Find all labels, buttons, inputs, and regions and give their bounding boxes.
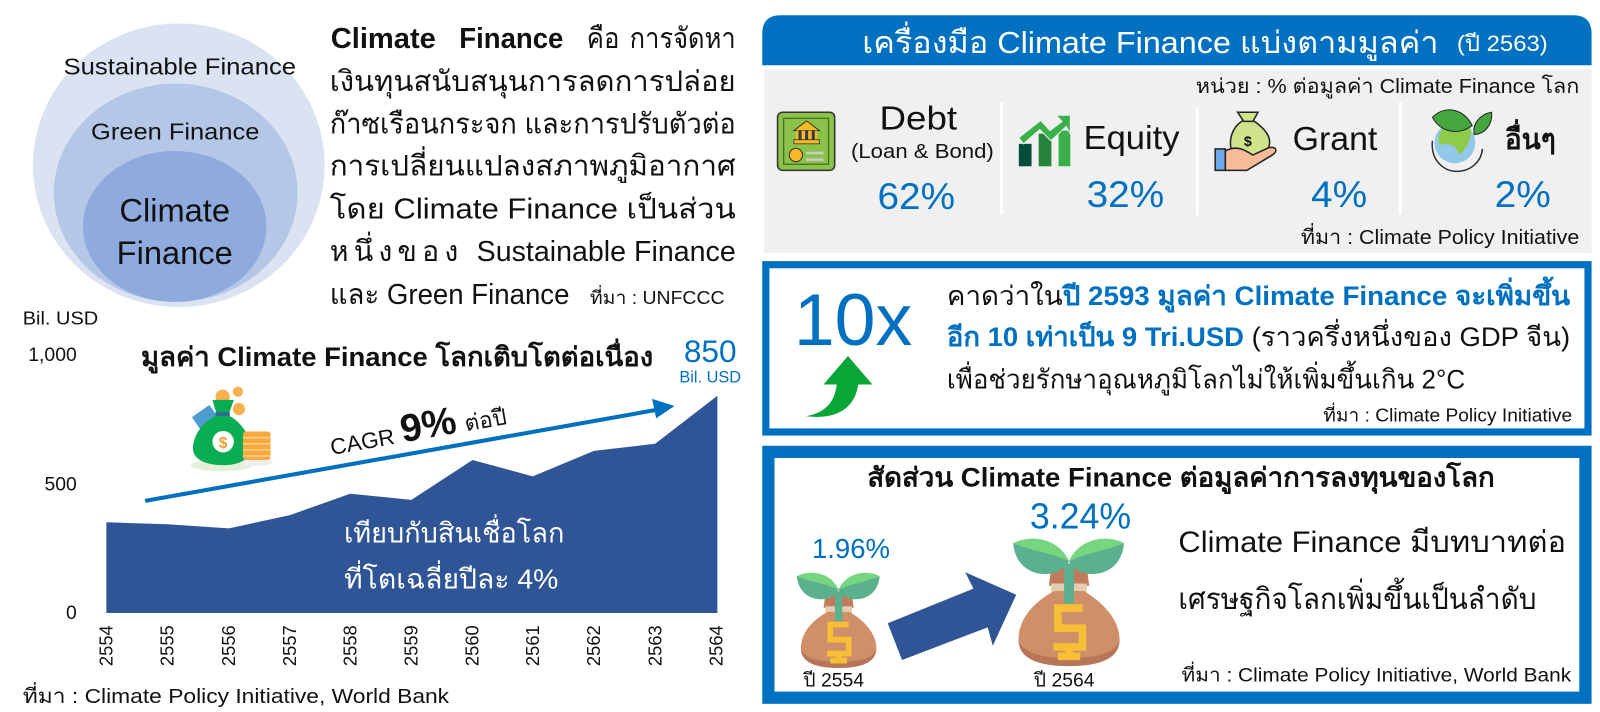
text block: role of Climate Finance — [1178, 526, 1566, 617]
text block: definition of Climate Finance: หนึ่งของ — [330, 232, 458, 268]
value: 32%: 32% — [1087, 174, 1164, 215]
value: 2%: 2% — [1495, 174, 1551, 215]
icon: grant hand with money: $ — [1244, 134, 1252, 150]
text inside area — [344, 515, 564, 595]
text line 2: อีก 10 เท่าเป็น 9 Tri.USD (ราวครึ่งหนึ่งของ GDP จีน) — [947, 319, 1570, 352]
text block: definition of Climate Finance: การจัดหา — [630, 23, 736, 55]
text block: definition of Climate Finance: Finance — [459, 23, 563, 55]
y axis labels: 1,000 — [28, 344, 77, 366]
chart: global Climate Finance growth — [23, 307, 741, 708]
unit note: หน่วย : % ต่อมูลค่า Climate Finance โลก — [1196, 74, 1579, 99]
icon: large money bag with sprout — [1013, 539, 1124, 666]
label: Equity: Equity — [1084, 120, 1180, 157]
text block: definition of Climate Finance: การเปลี่ยนแปลงสภาพภูมิอากาศ — [330, 146, 736, 183]
icon: equity chart — [1019, 115, 1070, 166]
panel: instruments by value — [762, 15, 1592, 253]
source: ที่มา : Climate Policy Initiative, World Bank — [1182, 661, 1571, 686]
x axis labels: 2554 — [95, 625, 116, 666]
label: year 2554: ปี 2554 — [803, 669, 864, 691]
box border — [768, 452, 1585, 698]
text block: definition of Climate Finance: ก๊าซเรือนกระจก และการปรับตัวต่อ — [330, 109, 736, 141]
icon: globe with leaves — [1432, 110, 1492, 171]
x axis labels: 2563 — [644, 625, 665, 666]
source: ที่มา : Climate Policy Initiative — [1323, 402, 1572, 425]
x axis labels: 2561 — [522, 625, 543, 666]
text block: role of Climate Finance: Climate Finance มีบทบาทต่อ — [1178, 526, 1566, 559]
value: 4%: 4% — [1311, 174, 1367, 215]
panel: 10x projection — [766, 265, 1588, 432]
callout: 850 Bil. USD — [679, 333, 741, 387]
y axis labels: 500 — [44, 474, 77, 496]
icon: grant hand with money — [1215, 112, 1276, 170]
label: CAGR 9% per year: CAGR 9%ต่อปี — [326, 390, 509, 464]
dividers — [1000, 102, 1402, 215]
label: Debt: Debt — [880, 101, 958, 138]
text line 3: เพื่อช่วยรักษาอุณหภูมิโลกไม่ให้เพิ่มขึ้นเกิน 2°C — [947, 361, 1465, 396]
header bar — [762, 15, 1592, 65]
x axis labels: 2555 — [157, 625, 178, 666]
icon: green up arrow — [806, 356, 872, 417]
arrow: growth trend — [145, 399, 675, 501]
x axis labels: 2564 — [705, 625, 726, 666]
text block: definition of Climate Finance: คือ — [587, 23, 619, 55]
y axis labels — [28, 344, 77, 624]
x axis labels: 2557 — [279, 625, 300, 666]
label: Green Finance: Green Finance — [91, 119, 259, 145]
text block: definition of Climate Finance: และ Green Finance — [330, 279, 569, 311]
label: Climate Finance: Finance — [117, 234, 233, 271]
icon: money bag with coins — [191, 387, 273, 471]
chart title: มูลค่า Climate Finance โลกเติบโตต่อเนื่อง — [141, 338, 653, 374]
area series — [106, 396, 717, 613]
box border — [766, 265, 1588, 432]
heading: สัดส่วน Climate Finance ต่อมูลค่าการลงทุนของโลก — [867, 462, 1495, 495]
callout: 850 Bil. USD: Bil. USD — [679, 369, 741, 387]
panel: share of world investment — [768, 452, 1585, 698]
nested circles diagram — [33, 23, 325, 307]
icon: debt certificate — [778, 112, 835, 170]
circle: Green Finance — [54, 84, 298, 302]
x axis labels: 2559 — [400, 625, 421, 666]
label: Loan and Bond: (Loan & Bond) — [851, 141, 994, 163]
value: 10x: 10x — [794, 279, 912, 361]
text block: role of Climate Finance: เศรษฐกิจโลกเพิ่มขึ้นเป็นลำดับ — [1178, 578, 1536, 617]
y axis unit: Bil. USD — [23, 307, 98, 328]
callout: 850 Bil. USD: 850 — [684, 333, 737, 369]
circle: Sustainable Finance — [33, 23, 325, 307]
label: Climate Finance: Climate — [119, 191, 230, 228]
text block: definition of Climate Finance: โดย Climate Finance เป็นส่วน — [330, 190, 736, 225]
heading: เครื่องมือ Climate Finance แบ่งตามมูลค่า — [862, 21, 1439, 61]
label: Grant: Grant — [1293, 121, 1378, 158]
arrow: increase — [888, 572, 1016, 660]
text line 1: คาดว่าในปี 2593 มูลค่า Climate Finance จะเพิ่มขึ้น — [947, 276, 1570, 313]
value: 62%: 62% — [878, 176, 955, 217]
text inside area: ที่โตเฉลี่ยปีละ 4% — [344, 561, 558, 595]
value: 1.96%: 1.96% — [812, 533, 890, 564]
source: ที่มา : Climate Policy Initiative — [1301, 223, 1579, 249]
icon: small money bag with sprout — [797, 573, 880, 668]
value: 3.24%: 3.24% — [1030, 496, 1131, 536]
y axis labels: 0 — [66, 602, 77, 624]
text inside area: เทียบกับสินเชื่อโลก — [344, 515, 564, 549]
source: ที่มา : Climate Policy Initiative, World Bank — [23, 682, 450, 708]
heading year: (ปี 2563) — [1457, 31, 1548, 56]
circle: Climate Finance — [83, 151, 267, 302]
x axis labels — [95, 625, 726, 666]
text block: definition of Climate Finance: Sustainable Finance — [477, 236, 736, 268]
text block: definition of Climate Finance — [330, 23, 736, 311]
text block: definition of Climate Finance: Climate — [331, 23, 436, 55]
x axis labels: 2562 — [583, 625, 604, 666]
gray background — [764, 69, 1592, 253]
label: others: อื่นๆ — [1505, 119, 1556, 156]
icon: money bag with coins: $ — [219, 435, 228, 452]
x axis labels: 2558 — [339, 625, 360, 666]
x axis labels: 2556 — [218, 625, 239, 666]
label: year 2564: ปี 2564 — [1033, 669, 1095, 691]
text block: definition of Climate Finance: ที่มา : UNFCCC — [590, 285, 725, 308]
label: Sustainable Finance: Sustainable Finance — [64, 53, 296, 79]
text block: definition of Climate Finance: เงินทุนสนับสนุนการลดการปล่อย — [330, 66, 736, 99]
x axis labels: 2560 — [462, 625, 483, 666]
